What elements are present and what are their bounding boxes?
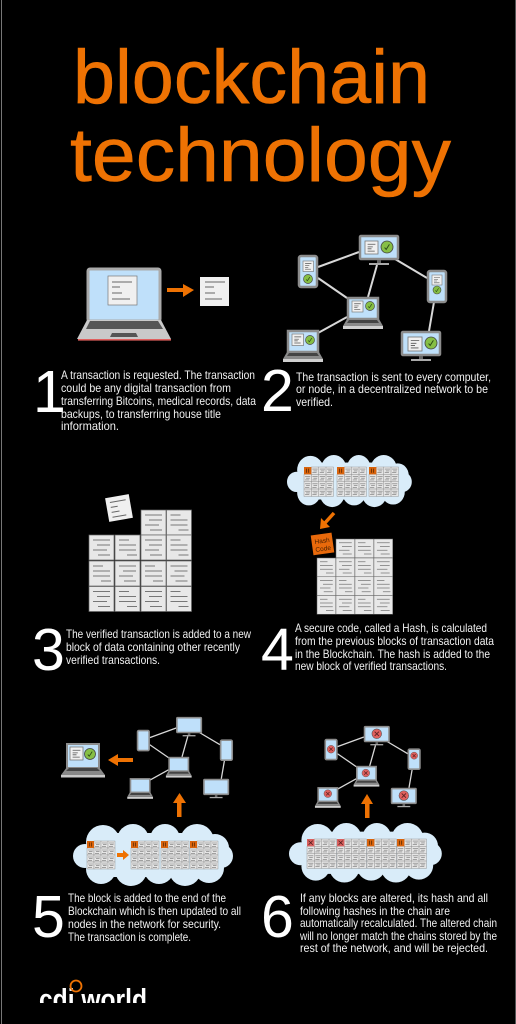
step 4 text: [295, 622, 494, 673]
icon: transaction document: [200, 277, 229, 306]
step 3 number: 3: [32, 617, 65, 683]
step 4 text: in the Blockchain. The hash is added to the: [295, 648, 490, 661]
step 2 text: or node, in a decentralized network to be: [296, 383, 488, 396]
step 5 text: The block is added to the end of the: [68, 892, 226, 905]
step 3 text: verified transactions.: [66, 654, 160, 667]
title: [70, 35, 451, 198]
cloud: altered chain: [289, 823, 442, 883]
logo: cdi world: [40, 980, 146, 1003]
step 1 text: transferring Bitcoins, medical records, data: [61, 395, 256, 408]
step 5 number: 5: [32, 884, 65, 950]
step 1 text: information.: [61, 420, 119, 433]
step 1 text: A transaction is requested. The transaction: [61, 369, 255, 382]
hash code tag: Code: [315, 545, 332, 554]
step 2 text: [296, 371, 491, 409]
cloud: block added to chain: [73, 824, 233, 886]
step 4 text: new block of verified transactions.: [295, 660, 447, 673]
step 5 text: Blockchain which is then updated to all: [68, 905, 241, 918]
step 5 text: The transaction is complete.: [68, 931, 191, 944]
step 3 text: block of data containing other recently: [66, 641, 240, 654]
step 6 text: following hashes in the chain are: [300, 905, 450, 918]
step 6 text: rest of the network, and will be rejected.: [300, 942, 488, 955]
network diagram: updated nodes: [127, 718, 232, 799]
step 5 text: [68, 892, 241, 944]
icon: laptop with verified transaction: [61, 744, 105, 778]
step 2 text: The transaction is sent to every computer,: [296, 371, 491, 384]
cloud: blockchain with previous blocks: [287, 455, 412, 507]
step 4 number: 4: [261, 617, 294, 683]
network diagram: rejected nodes: [315, 727, 420, 808]
step 3 text: The verified transaction is added to a new: [66, 628, 252, 641]
step 1 text: could be any digital transaction from: [61, 382, 231, 395]
hash code tag: Hash: [314, 537, 331, 546]
title: technology: [70, 113, 451, 198]
icon: laptop with transaction document: [77, 269, 171, 341]
new block of transactions: [89, 510, 192, 612]
step 2 text: verified.: [296, 396, 333, 409]
new block with hash: [317, 539, 393, 614]
icon: floating transaction document: [105, 494, 133, 522]
arrow: cloud to network: [173, 793, 186, 817]
step 6 text: If any blocks are altered, its hash and all: [300, 892, 488, 905]
hash code tag: [311, 533, 334, 555]
step 2 number: 2: [261, 358, 294, 424]
arrow: laptop to document: [167, 284, 194, 297]
step 4 text: from the previous blocks of transaction data: [295, 635, 494, 648]
step 6 number: 6: [261, 884, 294, 950]
step 6 text: [299, 892, 497, 955]
step 4 text: A secure code, called a Hash, is calculated: [295, 622, 487, 635]
arrow: cloud to hash code: [320, 513, 334, 529]
step 1 text: [61, 369, 256, 433]
step 1 number: 1: [33, 359, 66, 425]
logo: cdi world: cdi world: [39, 984, 147, 1016]
step 3 text: [66, 628, 252, 667]
arrow: cloud to rejected network: [361, 794, 373, 818]
arrow: network to laptop: [108, 754, 133, 766]
title: blockchain: [73, 35, 430, 120]
step 1 text: backups, to transferring house title: [61, 408, 221, 421]
step 5 text: nodes in the network for security.: [68, 918, 221, 931]
network diagram: verifying nodes: [283, 236, 446, 362]
